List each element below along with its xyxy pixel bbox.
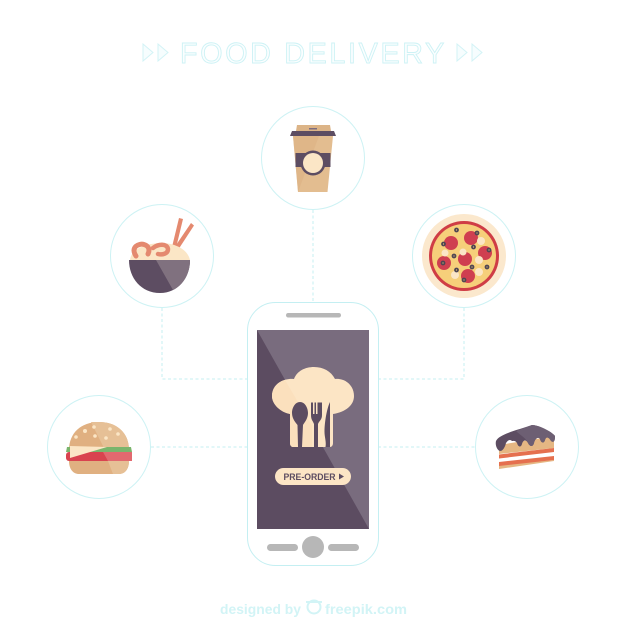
icon: chef hat with cutlery — [272, 367, 354, 447]
icon: bowl of rice with shrimp — [129, 218, 194, 293]
title — [143, 38, 482, 70]
icon: freepik logo — [306, 600, 322, 614]
icon: burger — [66, 422, 132, 474]
speaker — [286, 313, 341, 318]
title text: FOOD DELIVERY — [180, 38, 447, 70]
footer credit: designed by — [220, 601, 301, 617]
button: pre-order — [275, 468, 351, 485]
panel: coffee — [262, 106, 364, 210]
fork — [311, 402, 322, 447]
panel: pizza — [412, 204, 516, 308]
footer credit — [220, 600, 407, 617]
panel: burger — [48, 396, 150, 498]
connector lines — [151, 210, 476, 447]
knife — [324, 402, 330, 447]
panel: noodles — [110, 204, 214, 308]
button: pre-order: PRE-ORDER — [284, 472, 336, 483]
spoon — [292, 402, 308, 447]
icon: coffee cup — [290, 125, 336, 192]
icon: right double arrows — [457, 44, 482, 61]
icon: left double arrows — [143, 44, 168, 61]
panel: cake — [476, 396, 578, 498]
footer credit: freepik.com — [325, 601, 407, 617]
screen — [257, 330, 369, 529]
icon: cake slice — [496, 425, 555, 469]
home button and bars — [267, 536, 359, 558]
icon: pizza — [422, 214, 506, 298]
panel: phone — [248, 302, 378, 566]
